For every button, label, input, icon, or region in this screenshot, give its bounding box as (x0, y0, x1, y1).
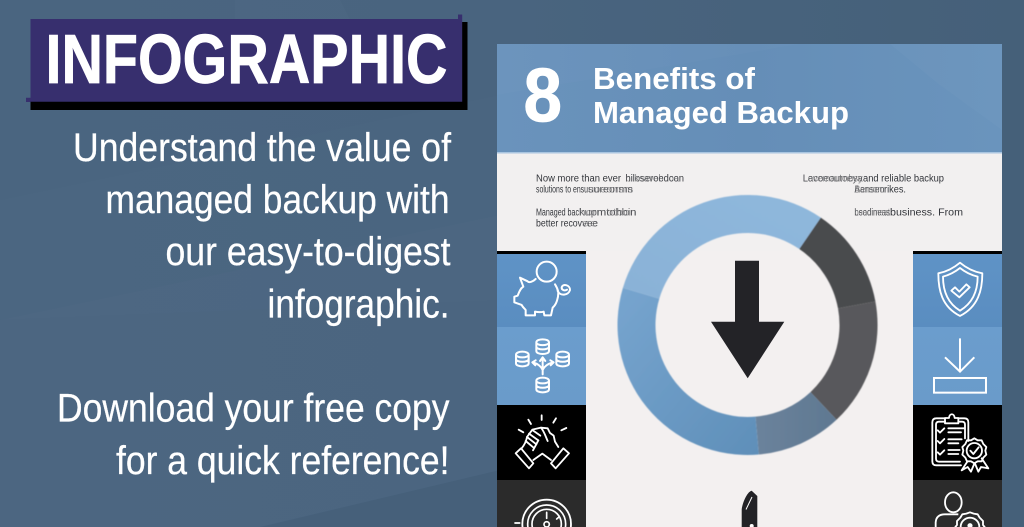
intro copy right: Levemaurnbsy (803, 174, 863, 184)
intro copy right: rikes. (884, 185, 906, 196)
icon: download tray (934, 338, 986, 393)
intro copy right: Benseo (854, 185, 885, 196)
intro copy left: hormotbon (579, 208, 636, 219)
icon: gauge clock (514, 498, 572, 527)
call to action text: Download your free copy (57, 386, 450, 430)
intro copy left: bilksavebdoan (626, 174, 684, 184)
call to action text: for a quick reference! (116, 439, 450, 483)
banner title: INFOGRAPHIC (46, 20, 448, 98)
icon: partial black marker (742, 491, 757, 527)
segment: dark grey (799, 218, 875, 308)
icon: download arrow (711, 261, 784, 378)
icon: piggy bank (514, 262, 570, 315)
intro copy right: Aansom (854, 185, 884, 196)
intro copy left: kupmtohbin (579, 208, 636, 219)
intro text block (73, 126, 452, 326)
segment: blue (617, 288, 759, 455)
intro copy right: Leadimeat (854, 208, 890, 219)
intro copy left: vee (582, 219, 599, 230)
icon: person with gear (934, 491, 986, 527)
left tile: data distribution (497, 327, 586, 405)
intro text block: Understand the value of (73, 126, 452, 170)
banner: INFOGRAPHIC (26, 14, 468, 110)
panel body (497, 44, 1002, 527)
intro copy left: hiloseroedcon (626, 174, 684, 184)
banner shadow (30, 22, 468, 110)
panel header (497, 44, 1002, 154)
right tile: specialist (913, 480, 1002, 527)
intro copy left (536, 174, 684, 230)
header title: Benefits of (593, 61, 756, 96)
left tile: clock (497, 480, 586, 527)
right tile: download (913, 327, 1002, 405)
header title: Managed Backup (593, 95, 849, 130)
icon: clipboard with award (932, 414, 988, 472)
icon: clasped hands (516, 415, 569, 468)
right tile rule (913, 251, 1002, 254)
right tile: checklist (913, 405, 1002, 480)
intro copy right: bsodineas (854, 208, 890, 219)
intro copy left: uoeonsm (588, 185, 633, 196)
intro copy right: Lacoeoutoeya (803, 174, 863, 184)
big number 8: 8 (524, 54, 562, 138)
donut chart (617, 195, 878, 455)
left tile rule (497, 251, 586, 254)
call to action text (57, 386, 450, 483)
intro copy right: and reliable backup (863, 174, 945, 184)
left tile: piggy bank (497, 254, 586, 327)
right tile: shield (913, 254, 1002, 327)
intro text block: our easy-to-digest (166, 230, 450, 274)
intro copy left: Now more than ever (536, 174, 622, 184)
left tile: partnership (497, 405, 586, 480)
center column (586, 251, 913, 527)
intro copy right: business. From (890, 208, 963, 219)
intro text block: managed backup with (106, 178, 450, 222)
segment: slate (756, 392, 836, 454)
banner plate (26, 14, 462, 102)
icon: security shield (938, 263, 982, 316)
segment: mid grey (810, 302, 878, 420)
intro text block: infographic. (268, 282, 450, 326)
intro copy left: ae (582, 219, 599, 230)
icon: databases with arrows (516, 339, 569, 392)
intro copy left: sureorms (588, 185, 633, 196)
header title (593, 61, 849, 130)
infographic preview panel (497, 44, 1002, 527)
intro copy right (803, 174, 963, 219)
segment: light blue (623, 195, 821, 299)
intro copy left: better recov (536, 219, 582, 230)
intro copy left: solutions to ensu (536, 185, 588, 196)
intro copy left: Managed bac (536, 208, 579, 219)
